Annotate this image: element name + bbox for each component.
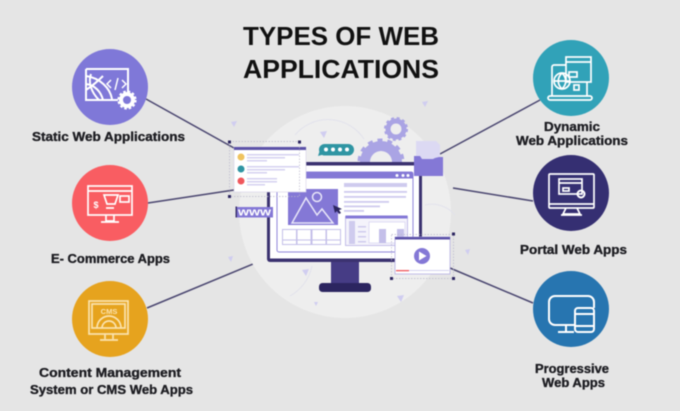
label — [30, 365, 193, 397]
table panel — [346, 216, 408, 246]
icon circle: progressive — [533, 271, 609, 347]
icon: CMS monitor — [89, 301, 128, 340]
label: Content Management — [39, 365, 182, 380]
video window — [390, 232, 455, 280]
monitor stand — [331, 262, 359, 283]
label: Progressive — [535, 361, 609, 376]
label — [535, 361, 609, 390]
central illustration — [228, 101, 470, 306]
icon circle: static web — [72, 49, 148, 125]
label: Web Apps — [542, 375, 605, 390]
label: Web Applications — [516, 133, 628, 148]
speech bubble — [318, 144, 354, 156]
text lines — [344, 183, 407, 212]
label: Portal Web Apps — [520, 242, 627, 257]
icon: laptop with windows — [548, 57, 592, 100]
www tag — [236, 206, 273, 218]
icon: desktop and phone — [549, 296, 594, 332]
title — [243, 21, 439, 84]
label — [516, 119, 628, 148]
icon circle: CMS — [72, 281, 148, 357]
item: E-Commerce Apps: $ — [93, 200, 99, 210]
www tag: www — [237, 206, 272, 218]
cursor — [333, 205, 342, 214]
background circle — [239, 106, 451, 318]
label: E- Commerce Apps — [51, 251, 170, 266]
thumbnail grid — [282, 230, 341, 244]
decorative arcs — [290, 120, 455, 296]
title: TYPES OF WEB — [243, 21, 439, 51]
folder — [414, 141, 443, 176]
icon circle: portal — [533, 155, 609, 231]
icon: shopping cart screen — [88, 186, 132, 222]
title: APPLICATIONS — [243, 54, 439, 84]
item: Progressive Web Apps — [533, 271, 609, 390]
item: Portal Web Apps — [520, 155, 627, 257]
monitor — [267, 162, 422, 262]
small triangles — [228, 101, 470, 306]
item: Dynamic Web Applications — [516, 40, 628, 148]
label: Dynamic — [544, 119, 600, 134]
icon: portal monitor — [549, 174, 594, 215]
label: Static Web Applications — [32, 129, 185, 144]
item: Content Management System — [30, 281, 193, 397]
main window — [277, 172, 413, 252]
item: Static Web Applications — [32, 49, 185, 144]
icon circle: dynamic — [533, 40, 609, 116]
connector lines — [146, 99, 540, 308]
list window — [228, 140, 306, 198]
decorative gears — [359, 118, 407, 184]
item: E-Commerce Apps — [51, 165, 170, 266]
icon circle: e-commerce — [72, 165, 148, 241]
image placeholder — [288, 189, 338, 225]
item: Content Management System: CMS — [101, 307, 117, 316]
label: System or CMS Web Apps — [30, 382, 193, 397]
icon: globe window and gear — [86, 69, 136, 108]
